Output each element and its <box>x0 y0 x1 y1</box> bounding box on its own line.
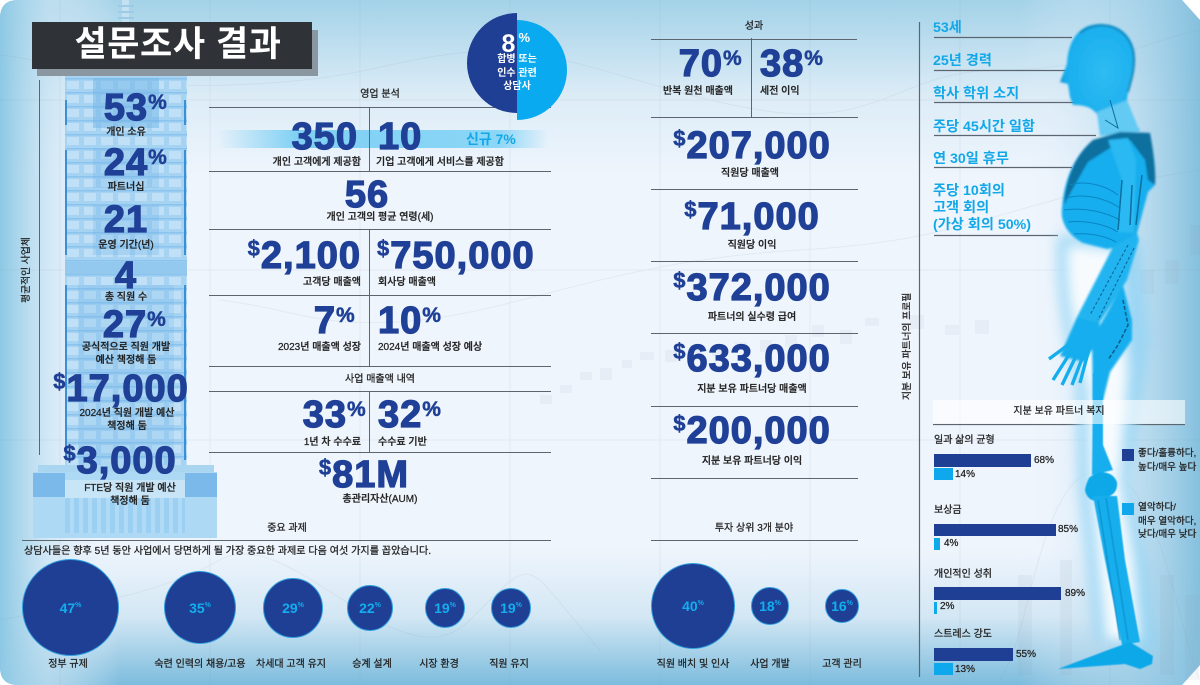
stat: fee based <box>378 394 441 448</box>
stat: revenue per equity partner: $633,000 <box>673 338 831 380</box>
stat: average client age: 56 <box>345 174 389 216</box>
legend: good: 높다/매우 높다 <box>1138 462 1196 472</box>
bubble: staffing: 40 <box>682 598 698 614</box>
stat: 2024 expected growth: 2024년 매출액 성장 예상 <box>378 342 482 353</box>
title: 설문조사 결과 <box>74 25 282 64</box>
bubble: next generation clients: 29 <box>282 600 298 616</box>
stat: profit per employee: $71,000 <box>684 196 820 238</box>
stat: recurring revenue: % <box>723 47 742 70</box>
bar group: compensation <box>934 504 1078 550</box>
bubble: next generation clients <box>263 578 323 638</box>
bubble: succession planning <box>347 585 393 631</box>
pie: M&A consultants: 합병 또는 <box>497 54 537 65</box>
stat: first-year fees: 33 <box>303 394 347 436</box>
legend: poor <box>1122 502 1196 540</box>
heading: top investment areas: 투자 상위 3개 분야 <box>715 523 793 534</box>
bar group: stress level: 13% <box>955 664 975 675</box>
bar group: personal fulfillment <box>934 568 1085 614</box>
label: 직원 배치 및 인사 <box>657 659 729 670</box>
label: 숙련 인력의 채용/고용 <box>154 659 246 670</box>
stat: 2024 development budget <box>53 368 189 432</box>
stat: formal development budget <box>82 304 170 366</box>
stat: assets under management: 총관리자산(AUM) <box>343 494 417 505</box>
stat: years in operation: 운영 기간(년) <box>98 240 154 251</box>
faint background chart <box>540 225 1200 680</box>
bubble: business development: 18 <box>759 598 775 614</box>
bar group: work-life balance: 일과 삶의 균형 <box>934 435 995 446</box>
stat: recurring revenue: 70 <box>679 43 723 85</box>
benefits panel <box>933 400 1185 424</box>
legend: poor: 열악하다/ <box>1138 502 1176 513</box>
heading: performance: 성과 <box>745 21 763 32</box>
label: 차세대 고객 유지 <box>256 659 326 670</box>
stat: average client age <box>326 174 434 223</box>
heading: sales analysis: 영업 분석 <box>360 89 400 100</box>
stat: years in operation <box>98 199 154 251</box>
stat: 2023 revenue growth: 2023년 매출액 성장 <box>278 342 361 353</box>
bar group: stress level: 55% <box>1016 649 1036 660</box>
stat: formal development budget: 공식적으로 직원 개발 <box>82 342 170 353</box>
stat: partner take-home pay: $372,000 <box>673 267 831 309</box>
profile: client meetings: (가상 회의 50%) <box>933 217 1031 233</box>
stat: profit per employee: 직원당 이익 <box>728 240 776 251</box>
stat: pre-tax profit: 38 <box>760 43 804 85</box>
stat: pre-tax profit <box>760 43 823 97</box>
stat: 2023 revenue growth <box>278 300 361 353</box>
profile: experience: 25년 경력 <box>933 53 992 69</box>
label: 정부 규제 <box>48 659 88 670</box>
bar group: compensation: 85% <box>1058 524 1078 535</box>
stat: individual ownership <box>104 87 167 138</box>
stat: partner take-home pay: 파트너의 실수령 급여 <box>708 312 796 323</box>
heading: revenue breakdown: 사업 매출액 내역 <box>345 374 415 385</box>
bubble: client management: 16 <box>831 598 847 614</box>
pie: M&A consultants: 8 <box>502 30 515 58</box>
stat: partnership: 24 <box>104 142 148 184</box>
stat: 2024 expected growth: 10 <box>378 300 422 342</box>
legend: poor: 낮다/매우 낮다 <box>1138 529 1196 540</box>
legend: good: 좋다/훌륭하다, <box>1138 448 1196 459</box>
bubble: next generation clients: % <box>298 602 304 609</box>
bubble: market environment <box>425 588 465 628</box>
stat: development budget per FTE: 책정해 둠 <box>110 496 150 507</box>
bubble: market environment: % <box>450 602 456 609</box>
stat: pre-tax profit: % <box>804 47 823 70</box>
bubble: skilled talent <box>164 571 236 644</box>
stat: 2024 expected growth <box>378 300 482 353</box>
stat: employees: 총 직원 수 <box>105 292 147 303</box>
stat: individual ownership: 개인 소유 <box>106 127 146 138</box>
legend: good <box>1122 448 1196 472</box>
stat: profit per equity partner: 지분 보유 파트너당 이익 <box>702 456 802 467</box>
stat: revenue per employee: 직원당 매출액 <box>721 168 779 179</box>
bubble: client management: % <box>847 600 853 607</box>
stat: pre-tax profit: 세전 이익 <box>760 86 800 97</box>
bubble: succession planning: 22 <box>359 600 375 616</box>
bubble: government regulation: % <box>75 602 81 608</box>
stat: development budget per FTE: FTE당 직원 개발 예산 <box>84 483 176 494</box>
stat: employees: 4 <box>115 255 137 297</box>
bubble: business development: % <box>775 600 781 607</box>
band behind sales figures <box>218 130 548 148</box>
heading: key challenges: 중요 과제 <box>267 523 307 534</box>
stat: individual ownership: 53 <box>104 87 148 129</box>
stat: 2024 development budget: 책정해 둠 <box>107 421 147 432</box>
stat: individual clients: 350 <box>292 116 358 158</box>
bubble: staff retention <box>491 588 531 628</box>
bar group: stress level <box>934 628 1036 675</box>
stat: formal development budget: 27 <box>103 304 147 346</box>
bubble: client management <box>825 589 859 623</box>
profile: work hours: 주당 45시간 일함 <box>933 119 1035 135</box>
profile: age: 53세 <box>933 20 962 36</box>
stat: employees <box>105 255 147 303</box>
stat: partnership: 파트너십 <box>108 182 144 193</box>
bar group: personal fulfillment: 89% <box>1065 588 1085 599</box>
bubble: staffing <box>651 563 735 649</box>
stat: 2023 revenue growth: % <box>336 304 355 327</box>
legend: poor: 매우 열악하다, <box>1138 516 1196 526</box>
profile: client meetings: 고객 회의 <box>933 200 989 216</box>
pie: M&A consultants <box>467 13 567 120</box>
bar group: work-life balance: 68% <box>1034 455 1054 466</box>
stat: individual clients <box>272 116 361 168</box>
stat: 2024 expected growth: % <box>422 304 441 327</box>
icon: skeleton figure <box>1049 24 1156 669</box>
bubble: government regulation: 47 <box>60 600 75 616</box>
stat: revenue per client: 고객당 매출액 <box>303 277 361 288</box>
bubble: skilled talent: 35 <box>189 600 205 616</box>
stat: recurring revenue: 반복 원천 매출액 <box>663 86 733 97</box>
stat: revenue per employee: $207,000 <box>673 125 831 167</box>
stat: business clients: 기업 고객에게 서비스를 제공함 <box>376 157 504 168</box>
bubble: business development <box>751 587 789 625</box>
bar group: stress level: 스트레스 강도 <box>934 629 992 640</box>
bar group: personal fulfillment: 개인적인 성취 <box>934 569 992 580</box>
bar group: personal fulfillment: 2% <box>940 601 954 612</box>
stat: 2024 development budget: 2024년 직원 개발 예산 <box>80 408 174 419</box>
stat: partnership: % <box>148 146 167 169</box>
bubble: skilled talent: % <box>205 602 211 608</box>
bar group: work-life balance: 14% <box>955 469 975 480</box>
benefits panel: 지분 보유 파트너 복지 <box>1013 406 1105 417</box>
stat: development budget per FTE <box>63 440 177 507</box>
stat: first-year fees: % <box>347 398 366 421</box>
bar group: compensation: 4% <box>944 538 958 549</box>
stat: business clients: 10 <box>378 116 422 158</box>
bubble: staff retention: % <box>516 602 522 609</box>
stat: revenue per firm: $750,000 <box>377 235 535 277</box>
stat: revenue per firm: 회사당 매출액 <box>378 277 436 288</box>
stat: years in operation: 21 <box>104 199 148 241</box>
stat: formal development budget: % <box>147 308 166 331</box>
note: new 7%: 신규 7% <box>466 131 516 147</box>
pie: M&A consultants: % <box>518 30 530 45</box>
stat: individual ownership: % <box>148 91 167 114</box>
stat: fee based: 수수료 기반 <box>378 437 427 448</box>
stat: individual clients: 개인 고객에게 제공함 <box>273 157 361 168</box>
stat: revenue per client: $2,100 <box>248 235 361 277</box>
stat: 2024 development budget: $17,000 <box>53 368 189 410</box>
stat: first-year fees: 1년 차 수수료 <box>304 437 361 448</box>
bubble: succession planning: % <box>375 602 381 609</box>
label: 사업 개발 <box>750 659 790 670</box>
bubble: staffing: % <box>698 600 704 607</box>
stat: 2023 revenue growth: 7 <box>314 300 336 342</box>
side label: equity partner profile: 지분 보유 파트너의 프로필 <box>902 293 913 400</box>
stat: development budget per FTE: $3,000 <box>63 440 177 482</box>
label: 시장 환경 <box>419 659 459 670</box>
stat: first-year fees <box>302 394 366 448</box>
stat: fee based: % <box>422 398 441 421</box>
pie: M&A consultants: 인수 관련 <box>497 68 537 78</box>
stat: business clients <box>376 116 504 168</box>
profile: vacation: 연 30일 휴무 <box>933 151 1009 167</box>
bubble: market environment: 19 <box>434 600 450 616</box>
stat: average client age: 개인 고객의 평균 연령(세) <box>326 212 434 223</box>
label: 고객 관리 <box>822 659 862 670</box>
bar group: compensation: 보상금 <box>934 505 962 516</box>
bar group: work-life balance <box>934 434 1054 480</box>
title <box>32 22 318 76</box>
stat: assets under management: $81M <box>319 454 409 496</box>
tower <box>33 0 217 538</box>
label: 직원 유지 <box>489 659 529 670</box>
profile: client meetings <box>933 182 1031 233</box>
profile: client meetings: 주당 10회의 <box>933 183 1005 199</box>
stat: profit per equity partner: $200,000 <box>673 410 831 452</box>
bubble: government regulation <box>22 559 119 656</box>
intro: challenges: 상담사들은 향후 5년 동안 사업에서 당면하게 될 가장 중요한 과제로 다음 여섯 가지를 꼽았습니다. <box>24 546 431 557</box>
bubble: staff retention: 19 <box>500 600 516 616</box>
pie: M&A consultants: 상담사 <box>503 81 531 92</box>
profile: degree: 학사 학위 소지 <box>933 86 1019 102</box>
stat: revenue per equity partner: 지분 보유 파트너당 매출액 <box>697 384 807 395</box>
stat: partnership <box>104 142 167 193</box>
label: 승계 설계 <box>352 659 392 670</box>
stat: recurring revenue <box>663 43 742 97</box>
stat: fee based: 32 <box>378 394 422 436</box>
side label: average firm: 평균적인 사업체 <box>21 237 32 303</box>
stat: formal development budget: 예산 책정해 둠 <box>96 355 156 366</box>
